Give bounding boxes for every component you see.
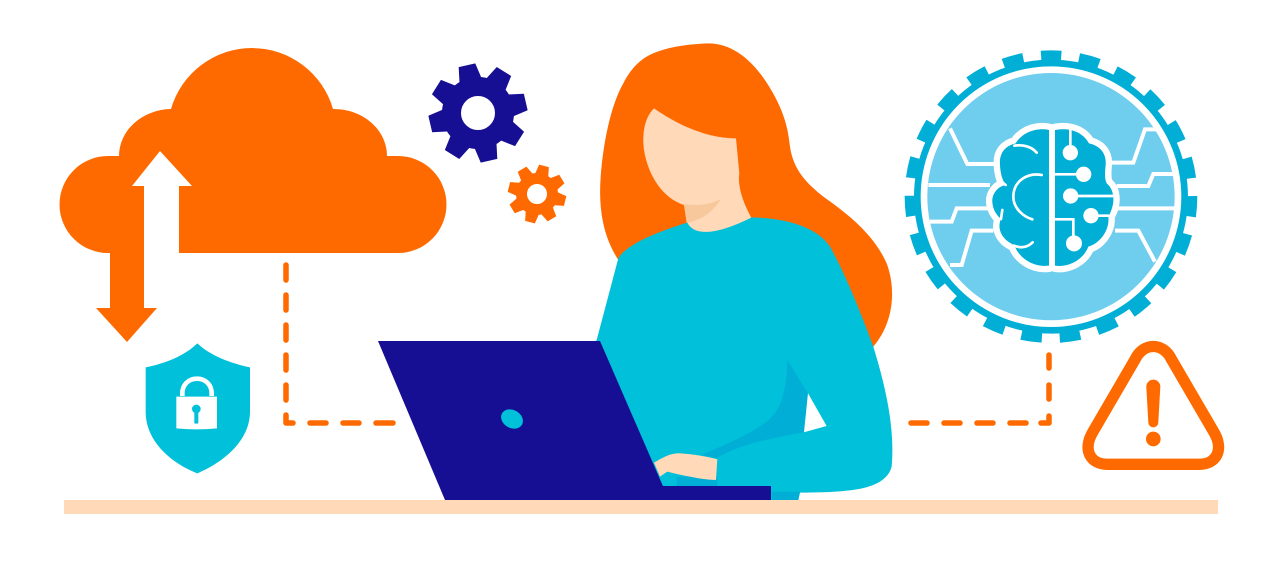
sweater [580, 217, 892, 500]
hair [600, 43, 892, 347]
cloud shape [60, 48, 446, 253]
triangle outline [1088, 346, 1219, 464]
shadow under hand [677, 477, 800, 500]
sweater arm shadow [702, 360, 808, 458]
circuit traces [928, 128, 1175, 265]
dashed connector: cloud to laptop [286, 265, 393, 423]
gear ring and disk with circuit traces [910, 55, 1192, 338]
face and neck [643, 108, 752, 243]
hand [654, 453, 717, 480]
gap between arm and body [804, 393, 827, 432]
figure: woman at laptop [580, 43, 892, 500]
shield [146, 343, 250, 473]
orange download arrow [96, 250, 157, 342]
icon: large navy gear [428, 63, 528, 163]
brain [992, 129, 1113, 266]
icon: warning triangle [1088, 346, 1219, 464]
icon: cloud with upload and download arrows [60, 48, 446, 342]
icon: AI brain in circuit gear [910, 55, 1192, 338]
light blue disk [927, 73, 1175, 320]
laptop logo dot [498, 405, 526, 433]
gear teeth [910, 55, 1192, 338]
dashed connector: brain to laptop [911, 355, 1049, 423]
gear ring [917, 63, 1185, 330]
neck shadow [684, 199, 721, 223]
icon: security shield with padlock [146, 343, 250, 473]
laptop base [660, 486, 771, 500]
laptop lid [378, 341, 669, 500]
laptop [378, 341, 771, 500]
white upload arrow [132, 151, 192, 254]
exclamation mark [1146, 380, 1161, 446]
icon: small orange gear [507, 164, 567, 224]
padlock [176, 379, 217, 429]
table top [64, 500, 1218, 514]
